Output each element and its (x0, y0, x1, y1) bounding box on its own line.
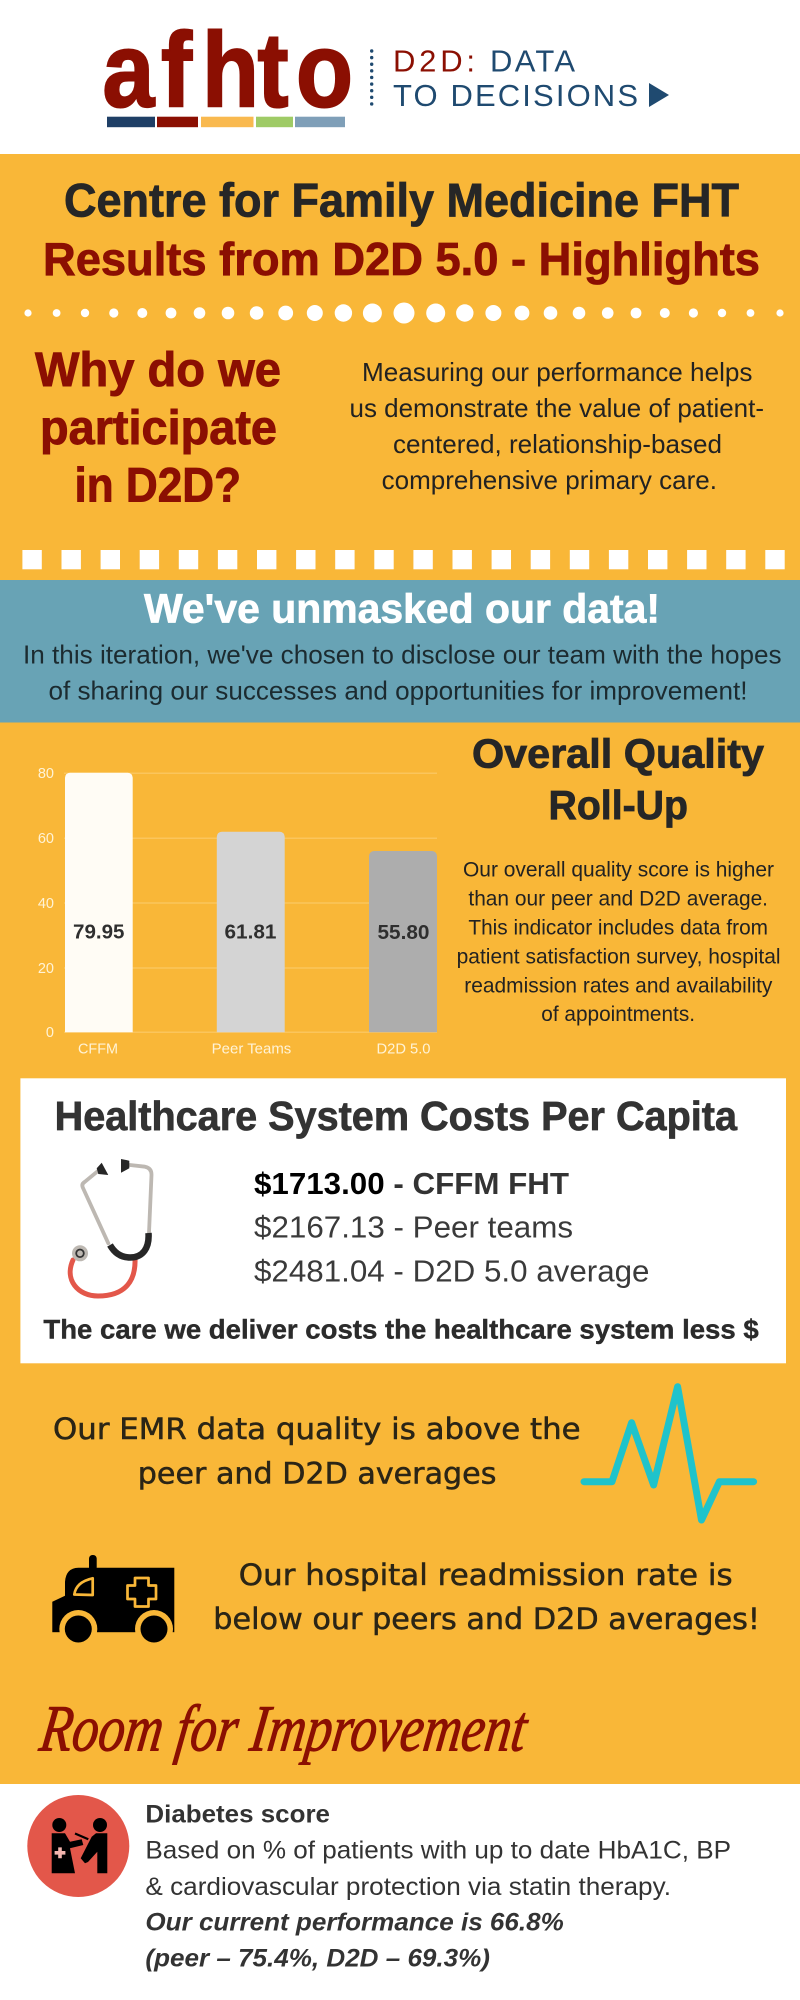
text block: hospital readmission: Our hospital readmission rate is (239, 1558, 733, 1592)
text block: overall quality: of appointments. (541, 1003, 695, 1026)
text: diabetes performance: (peer – 75.4%, D2D – 69.3%) (145, 1945, 490, 1973)
y axis labels: 0 (46, 1025, 54, 1041)
text block: why we participate: centered, relationship-based (393, 429, 722, 459)
heading: unmasked: We've unmasked our data! (144, 586, 660, 632)
bar: CFFM (65, 773, 133, 1032)
icon: stethoscope (70, 1159, 152, 1296)
icon: vaccination (27, 1795, 129, 1897)
heading: why do we participate (35, 344, 281, 513)
heading: overall quality roll-up: Overall Quality (472, 731, 764, 777)
bar: D2D 5.0 (369, 851, 437, 1032)
cost: D2D average: $2481.04 - D2D 5.0 average (254, 1254, 650, 1289)
icon: heartbeat pulse (584, 1387, 754, 1520)
heading: overall quality roll-up: Roll-Up (548, 782, 688, 828)
y axis labels (38, 766, 54, 1041)
heading: why do we participate: participate (40, 402, 277, 455)
y axis labels: 40 (38, 896, 54, 912)
text block: why we participate: comprehensive primary care. (382, 465, 717, 495)
heading: why do we participate: in D2D? (74, 460, 241, 513)
text block: unmasked: In this iteration, we've chosen to disclose our team with the hopes (23, 639, 782, 669)
cost: peer teams: $2167.13 - Peer teams (254, 1210, 573, 1245)
text block: why we participate (350, 357, 764, 495)
x axis labels (78, 1041, 430, 1057)
x axis labels: CFFM (78, 1041, 118, 1057)
logo colour bars (107, 117, 345, 127)
callout: costs less: The care we deliver costs the healthcare system less $ (43, 1314, 759, 1344)
heading: why do we participate: Why do we (35, 344, 281, 397)
title: Results from D2D 5.0 - Highlights (43, 233, 760, 285)
bar chart: overall quality (38, 766, 437, 1057)
text block: overall quality: This indicator includes data from (468, 916, 768, 939)
bar values: 55.80 (378, 921, 430, 944)
D2D tagline: TO DECISIONS (393, 78, 638, 113)
text: diabetes description (145, 1837, 731, 1901)
y axis labels: 60 (38, 831, 54, 847)
y axis labels: 20 (38, 961, 54, 977)
cost: CFFM FHT: $1713.00 - CFFM FHT (254, 1166, 569, 1201)
panel: unmasked data (0, 580, 800, 722)
D2D tagline: DATA (490, 44, 575, 79)
heading: overall quality roll-up (472, 731, 764, 828)
text block: overall quality (457, 859, 781, 1026)
text: diabetes heading: Diabetes score (145, 1801, 330, 1829)
title (43, 174, 760, 285)
header: logo band (0, 0, 800, 154)
text block: unmasked (23, 639, 782, 705)
D2D tagline: D2D: (393, 44, 475, 79)
text: diabetes description: & cardiovascular protection via statin therapy. (145, 1873, 671, 1901)
text block: hospital readmission: below our peers and D2D averages! (213, 1602, 760, 1636)
bar values: 79.95 (73, 920, 124, 943)
bar values: 61.81 (224, 920, 276, 943)
logo wordmark: afhto (103, 12, 353, 130)
text: diabetes performance: Our current performance is 66.8% (145, 1909, 564, 1937)
text block: overall quality: than our peer and D2D average. (468, 888, 768, 911)
heading: costs per capita: Healthcare System Costs Per Capita (55, 1093, 738, 1139)
text block: EMR data quality: Our EMR data quality is above the (53, 1412, 581, 1446)
title: Centre for Family Medicine FHT (64, 174, 739, 227)
y axis labels: 80 (38, 766, 54, 782)
text block: why we participate: Measuring our performance helps (362, 357, 752, 387)
text block: hospital readmission (213, 1558, 760, 1636)
bar: peer teams (217, 832, 285, 1032)
text block: overall quality: readmission rates and availability (464, 974, 773, 997)
text block: overall quality: patient satisfaction survey, hospital (457, 945, 781, 968)
text: diabetes performance (145, 1909, 564, 1973)
D2D tagline (393, 44, 669, 113)
x axis labels: D2D 5.0 (376, 1041, 430, 1057)
text block: why we participate: us demonstrate the value of patient- (350, 393, 764, 423)
text: diabetes description: Based on % of patients with up to date HbA1C, BP (145, 1837, 731, 1865)
panel: diabetes score (0, 1784, 800, 2000)
text block: EMR data quality: peer and D2D averages (138, 1456, 496, 1490)
panel: healthcare system costs (20, 1078, 786, 1363)
text block: unmasked: of sharing our successes and opportunities for improvement! (48, 675, 748, 705)
text block: EMR data quality (53, 1412, 581, 1490)
icon: ambulance (52, 1555, 175, 1648)
heading: room for improvement: Room for Improvement (35, 1693, 533, 1766)
text block: overall quality: Our overall quality score is higher (463, 859, 774, 882)
bar values (73, 920, 430, 944)
x axis labels: Peer Teams (212, 1041, 291, 1057)
